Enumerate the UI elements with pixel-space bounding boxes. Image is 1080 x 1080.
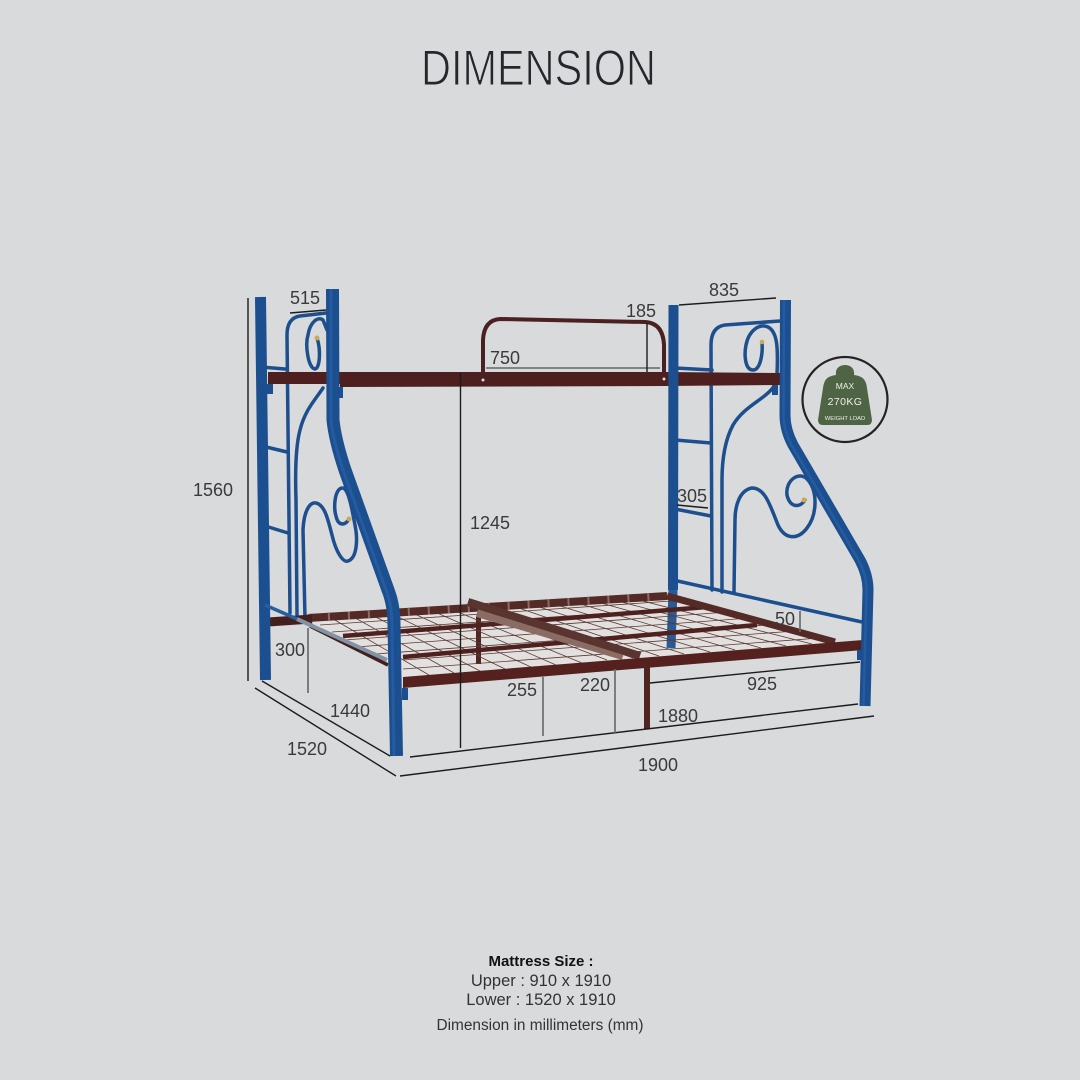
rear left post: [260, 297, 266, 680]
weight text: [825, 381, 865, 422]
dimension labels: 1560: [193, 480, 233, 500]
dimension labels: 515: [290, 288, 320, 308]
dimension labels: 300: [275, 640, 305, 660]
right side tube: [673, 580, 862, 622]
rail bolts: [482, 378, 666, 382]
mattress size notes: Mattress Size :: [488, 953, 594, 970]
mattress size notes: Lower : 1520 x 1910: [466, 991, 616, 1009]
rear centre leg: [476, 617, 481, 664]
mattress size notes: Dimension in millimeters (mm): [437, 1017, 643, 1034]
mesh base: [306, 594, 835, 677]
lower bed frame: [268, 590, 863, 729]
front rail: [403, 640, 863, 688]
title: DIMENSION: [421, 40, 656, 96]
dimension lines: [248, 298, 874, 776]
blue posts: [260, 289, 868, 756]
mattress size notes: [437, 953, 643, 1034]
dimension labels: [193, 280, 795, 775]
dimension labels: 1900: [638, 755, 678, 775]
right ladder scrollwork: [675, 321, 815, 592]
dimension labels: 185: [626, 301, 656, 321]
mattress size notes: Upper : 910 x 1910: [471, 972, 611, 990]
weight text: 270KG: [828, 396, 862, 408]
front right post: [784, 300, 868, 706]
mesh cross wires: [320, 600, 820, 669]
rear right post: [668, 305, 678, 590]
left ladder scrollwork: [261, 313, 357, 618]
dimension labels: 1520: [287, 739, 327, 759]
dimension labels: 50: [775, 609, 795, 629]
upper bunk rail: [268, 319, 780, 387]
back and side rails: [268, 596, 835, 665]
dimension labels: 835: [709, 280, 739, 300]
front centre leg: [644, 666, 650, 729]
dimension labels: 750: [490, 348, 520, 368]
dimension labels: 1880: [658, 706, 698, 726]
dimension labels: 220: [580, 675, 610, 695]
brass scroll caps: [314, 336, 806, 522]
left side tube: [265, 605, 387, 660]
guard rail: [483, 319, 664, 386]
bunk bed illustration: [260, 289, 868, 756]
front left post: [331, 289, 396, 756]
weight text: MAX: [836, 381, 855, 391]
weight load badge: [802, 357, 888, 442]
brackets: [270, 384, 860, 700]
rear post behind mesh: [671, 590, 673, 648]
weight icon: [818, 365, 872, 425]
dimension labels: 305: [677, 486, 707, 506]
dimension labels: 925: [747, 674, 777, 694]
thick cross bars: [343, 607, 757, 657]
mesh depth wires: [328, 597, 812, 675]
dimension labels: 1440: [330, 701, 370, 721]
dimension labels: 1245: [470, 513, 510, 533]
weight text: WEIGHT LOAD: [825, 416, 865, 422]
centre beams: [468, 602, 640, 656]
dimension labels: 255: [507, 680, 537, 700]
